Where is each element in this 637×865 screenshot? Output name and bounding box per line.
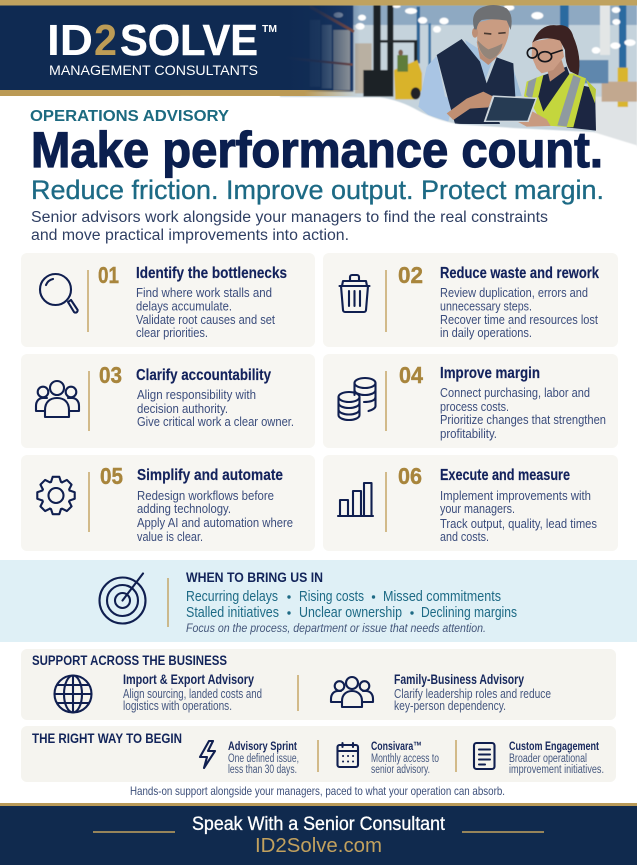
top gold bar — [0, 0, 637, 6]
photo: consultants with tablet — [418, 5, 596, 131]
body: adding technology. — [137, 501, 231, 516]
body: in daily operations. — [440, 325, 532, 340]
trigger list: Stalled initiatives — [186, 605, 279, 621]
body: delays accumulate. — [136, 298, 232, 314]
woman — [513, 25, 596, 131]
lower gold band — [0, 90, 358, 96]
body: Prioritize changes that strengthen — [440, 412, 606, 427]
panel: support across the business — [21, 649, 616, 720]
heading: Identify the bottlenecks — [136, 265, 287, 282]
logo: SOLVE — [120, 16, 258, 65]
body: Review duplication, errors and — [440, 285, 588, 300]
intro text: Senior advisors work alongside your managers to find the real constraints — [31, 209, 548, 226]
body: Give critical work a clear owner. — [137, 414, 294, 429]
number: 03 — [99, 362, 122, 388]
custom engagement — [509, 739, 604, 776]
family business advisory — [394, 671, 551, 713]
body: Recover time and resources lost — [440, 312, 598, 327]
logo: ID — [47, 16, 93, 65]
logo: TM — [262, 24, 277, 35]
import export advisory: Import & Export Advisory — [123, 671, 254, 687]
advisory sprint: less than 30 days. — [228, 764, 297, 776]
card 05 — [21, 455, 315, 551]
body — [137, 488, 293, 544]
logo: MANAGEMENT CONSULTANTS — [49, 62, 258, 78]
family business advisory: Clarify leadership roles and reduce — [394, 687, 551, 701]
man — [418, 5, 522, 124]
number: 02 — [398, 262, 423, 288]
icon: target — [100, 574, 146, 624]
trigger list: Rising costs — [299, 589, 364, 605]
body: your managers. — [440, 501, 515, 516]
logo: 2 — [94, 16, 117, 65]
icon: calendar — [338, 743, 358, 767]
body: decision authority. — [137, 401, 228, 416]
panel: the right way to begin — [21, 726, 616, 782]
consivara: Consivara™ — [371, 739, 422, 753]
body: Connect purchasing, labor and — [440, 385, 590, 400]
number: 04 — [399, 362, 423, 388]
body: Find where work stalls and — [136, 285, 272, 300]
main title: Make performance count. — [31, 122, 603, 178]
card 02 — [323, 253, 618, 347]
import export advisory: logistics with operations. — [123, 699, 232, 713]
body: and costs. — [440, 529, 489, 544]
import export advisory — [123, 671, 262, 713]
advisory sprint — [228, 739, 299, 776]
body: Validate root causes and set — [136, 312, 275, 327]
icon: document — [474, 743, 494, 769]
icon: gear — [37, 477, 75, 514]
heading: WHEN TO BRING US IN — [186, 569, 323, 585]
custom engagement: improvement initiatives. — [509, 764, 604, 776]
body: clear priorities. — [136, 325, 208, 340]
call to action: Speak With a Senior Consultant — [192, 814, 446, 835]
number: 06 — [398, 463, 422, 489]
trigger list — [186, 589, 517, 621]
body: profitability. — [440, 426, 497, 441]
heading: Simplify and automate — [137, 467, 283, 484]
trigger list: Recurring delays — [186, 589, 278, 605]
body: Implement improvements with — [440, 488, 591, 503]
heading: Clarify accountability — [136, 367, 271, 384]
heading: Execute and measure — [440, 467, 570, 484]
body — [136, 285, 275, 340]
logo — [47, 16, 277, 78]
white wave edge — [180, 96, 637, 187]
intro text: and move practical improvements into action. — [31, 227, 349, 244]
body: value is clear. — [137, 529, 203, 544]
footer — [0, 803, 637, 865]
icon: bar chart — [338, 483, 373, 516]
body — [440, 385, 606, 441]
family business advisory: key-person dependency. — [394, 699, 506, 713]
warehouse photo background — [280, 5, 637, 147]
card 01 — [21, 253, 315, 347]
panel: when to bring us in — [0, 560, 637, 642]
body — [440, 285, 598, 340]
body — [137, 387, 294, 429]
consivara: Monthly access to — [371, 753, 439, 765]
icon: lightning bolt — [200, 741, 215, 768]
card 04 — [323, 354, 618, 448]
icon: coin stacks — [338, 378, 376, 420]
custom engagement: Custom Engagement — [509, 739, 599, 753]
consivara: senior advisory. — [371, 764, 430, 776]
icon: globe — [54, 676, 92, 712]
advisory sprint: One defined issue, — [228, 753, 299, 765]
trigger list: Unclear ownership — [299, 605, 402, 621]
body: Apply AI and automation where — [137, 515, 293, 530]
heading: Improve margin — [440, 365, 540, 382]
card 03 — [21, 354, 315, 448]
icon: magnifier — [40, 274, 78, 313]
intro text — [31, 209, 548, 244]
number: 01 — [98, 262, 119, 288]
website: ID2Solve.com — [255, 835, 382, 857]
subtitle: Reduce friction. Improve output. Protect margin. — [31, 175, 604, 205]
icon: team — [36, 381, 79, 417]
trigger list: Declining margins — [421, 605, 517, 621]
heading: THE RIGHT WAY TO BEGIN — [32, 731, 182, 746]
trigger list: Missed commitments — [383, 589, 501, 605]
body: unnecessary steps. — [440, 298, 532, 314]
body: Track output, quality, lead times — [440, 516, 597, 531]
advisory sprint: Advisory Sprint — [228, 739, 297, 753]
body: Align responsibility with — [137, 387, 256, 402]
body: process costs. — [440, 399, 509, 414]
eyebrow: OPERATIONS ADVISORY — [30, 108, 230, 125]
number: 05 — [100, 463, 123, 489]
heading: SUPPORT ACROSS THE BUSINESS — [32, 653, 227, 668]
header banner — [0, 0, 637, 180]
card 06 — [323, 455, 618, 551]
icon: trash can — [340, 275, 370, 312]
focus note: Focus on the process, department or issue that needs attention. — [186, 621, 486, 635]
consivara — [371, 739, 439, 776]
support note: Hands-on support alongside your managers, paced to what your operation can absorb. — [130, 784, 505, 798]
import export advisory: Align sourcing, landed costs and — [123, 687, 262, 701]
icon: family group — [331, 677, 373, 707]
heading: Reduce waste and rework — [440, 265, 599, 282]
navy panel — [0, 5, 285, 90]
body — [440, 488, 597, 544]
family business advisory: Family-Business Advisory — [394, 671, 524, 687]
body: Redesign workflows before — [137, 488, 274, 503]
custom engagement: Broader operational — [509, 753, 587, 765]
tablet — [484, 95, 537, 122]
